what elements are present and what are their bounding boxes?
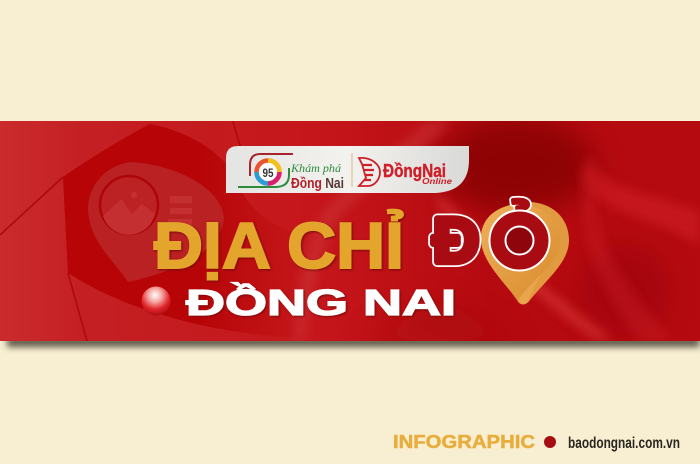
icon: red ball <box>142 286 170 316</box>
subtitle: Đồng Nai with red ball bullet <box>142 281 456 323</box>
title: Đỏ outlined: Ỏ <box>492 198 547 277</box>
red banner <box>0 117 700 341</box>
icon: footer dot <box>544 436 556 448</box>
location pin <box>481 202 569 304</box>
logo: Khám phá Đồng Nai: 95 <box>262 166 274 180</box>
title: Đỏ outlined: Đ <box>433 206 479 276</box>
footer: INFOGRAPHIC <box>393 431 535 452</box>
infographic canvas <box>0 121 700 452</box>
footer <box>393 431 680 452</box>
silk light folds <box>292 117 700 341</box>
logo: Khám phá Đồng Nai: Đồng Nai <box>291 175 344 192</box>
logo: Khám phá Đồng Nai: Khám phá <box>290 161 341 175</box>
title: Đỏ outlined <box>433 198 550 277</box>
logo: Đồng Nai Online <box>359 158 453 186</box>
title: Đỏ outlined: Ỏ <box>492 198 547 277</box>
logo plate <box>226 146 469 193</box>
title: Đỏ outlined: Đ <box>433 206 479 276</box>
logo: Khám phá Đồng Nai <box>238 154 344 192</box>
logo divider <box>352 153 353 187</box>
logo: Đồng Nai Online: Online <box>422 177 453 186</box>
subtitle: Đồng Nai with red ball bullet: ĐỒNG NAI <box>186 281 456 323</box>
banner shadow <box>7 337 700 347</box>
title: Địa chỉ: ĐỊA CHỈ <box>154 209 404 282</box>
logo: Đồng Nai Online: ĐồngNai <box>383 160 446 181</box>
camera watermark <box>0 121 268 341</box>
